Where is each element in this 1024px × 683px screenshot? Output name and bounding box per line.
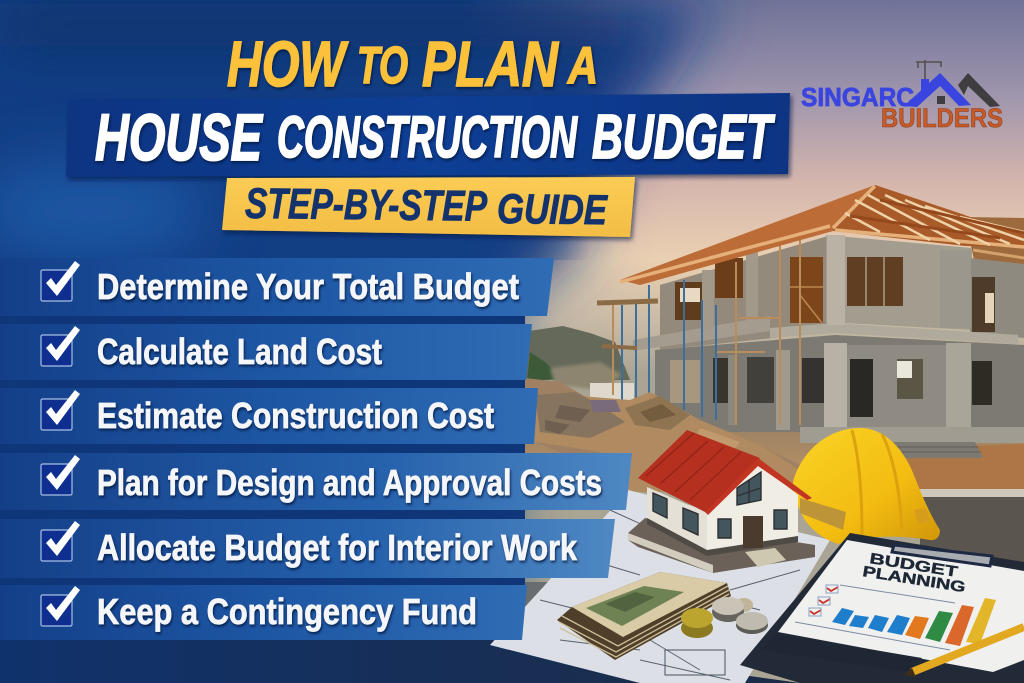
title line one: A <box>566 37 598 95</box>
clipboard: metal clip <box>892 545 992 566</box>
blueprint sheet <box>490 490 830 683</box>
logo: blue roof <box>904 73 971 107</box>
checklist item 4: Plan for Design and Approval Costs <box>97 462 602 503</box>
table surface <box>0 640 800 683</box>
building under construction <box>597 185 1024 458</box>
checklist item 3 <box>0 388 538 444</box>
logo: builders: BUILDERS <box>881 103 1003 133</box>
building: main roof <box>620 185 1024 285</box>
building: scaffolding <box>597 240 800 425</box>
building: upper windows <box>675 257 995 332</box>
subtitle text: STEP-BY-STEP <box>245 180 488 231</box>
clipboard: paper sheet <box>778 540 1024 672</box>
building: slabs and columns <box>633 235 1018 433</box>
title line one: TO <box>357 37 408 95</box>
title line two <box>95 100 776 174</box>
hard hat <box>793 428 940 544</box>
subtitle banner <box>222 177 635 237</box>
clipboard: heading: BUDGET <box>868 550 959 581</box>
title line one <box>227 28 598 100</box>
title line two: BUDGET <box>592 103 776 172</box>
checklist item 4 <box>0 453 632 510</box>
clipboard: heading: PLANNING <box>861 563 967 596</box>
logo: crane <box>916 60 942 80</box>
clipboard: checklist <box>795 585 955 650</box>
sand mound <box>525 392 810 492</box>
background: hill and town <box>522 326 634 408</box>
title line two: CONSTRUCTION <box>277 105 578 170</box>
cash stack <box>557 572 731 660</box>
background: ground <box>525 378 1024 640</box>
checklist item 6 <box>0 585 527 640</box>
clipboard: dark lower area <box>760 634 922 672</box>
model house: door <box>743 516 763 548</box>
checklist item 2: Calculate Land Cost <box>97 331 382 372</box>
building: lower walls <box>655 335 1024 432</box>
checklist item 5 <box>0 519 615 578</box>
building: back roof wing <box>965 217 1024 265</box>
model house: roof <box>638 430 760 513</box>
model house: windows <box>653 472 787 538</box>
checklist item 1: Determine Your Total Budget <box>97 266 519 307</box>
gravel on the mound <box>535 392 740 455</box>
clipboard: heading <box>861 550 967 596</box>
checklist item 2 <box>0 324 532 380</box>
logo: window <box>937 96 945 104</box>
building: lower openings <box>670 357 992 417</box>
subtitle text: GUIDE <box>497 185 609 233</box>
title line two: HOUSE <box>95 100 263 174</box>
title line one: HOW <box>227 28 348 100</box>
checklist item 3: Estimate Construction Cost <box>97 395 494 436</box>
grey gap behind list end <box>522 582 560 632</box>
checklist item 5: Allocate Budget for Interior Work <box>97 527 578 568</box>
clipboard: bar chart <box>832 598 996 646</box>
title line one: PLAN <box>422 28 559 100</box>
model house: walls <box>647 487 707 552</box>
title banner <box>66 93 790 177</box>
checklist item 6: Keep a Contingency Fund <box>97 591 477 632</box>
building: plinth and steps <box>800 427 1024 458</box>
coins <box>681 597 768 638</box>
logo: company name: SINGARC <box>801 82 914 112</box>
logo <box>801 60 1003 133</box>
checklist item 1 <box>0 258 554 316</box>
model house: base <box>628 518 815 573</box>
logo: grey roof <box>958 73 1000 107</box>
clipboard <box>740 533 1024 683</box>
pencil <box>903 627 1024 677</box>
building: upper walls <box>660 235 1024 350</box>
background: blue field <box>0 0 720 683</box>
model house <box>628 430 815 573</box>
